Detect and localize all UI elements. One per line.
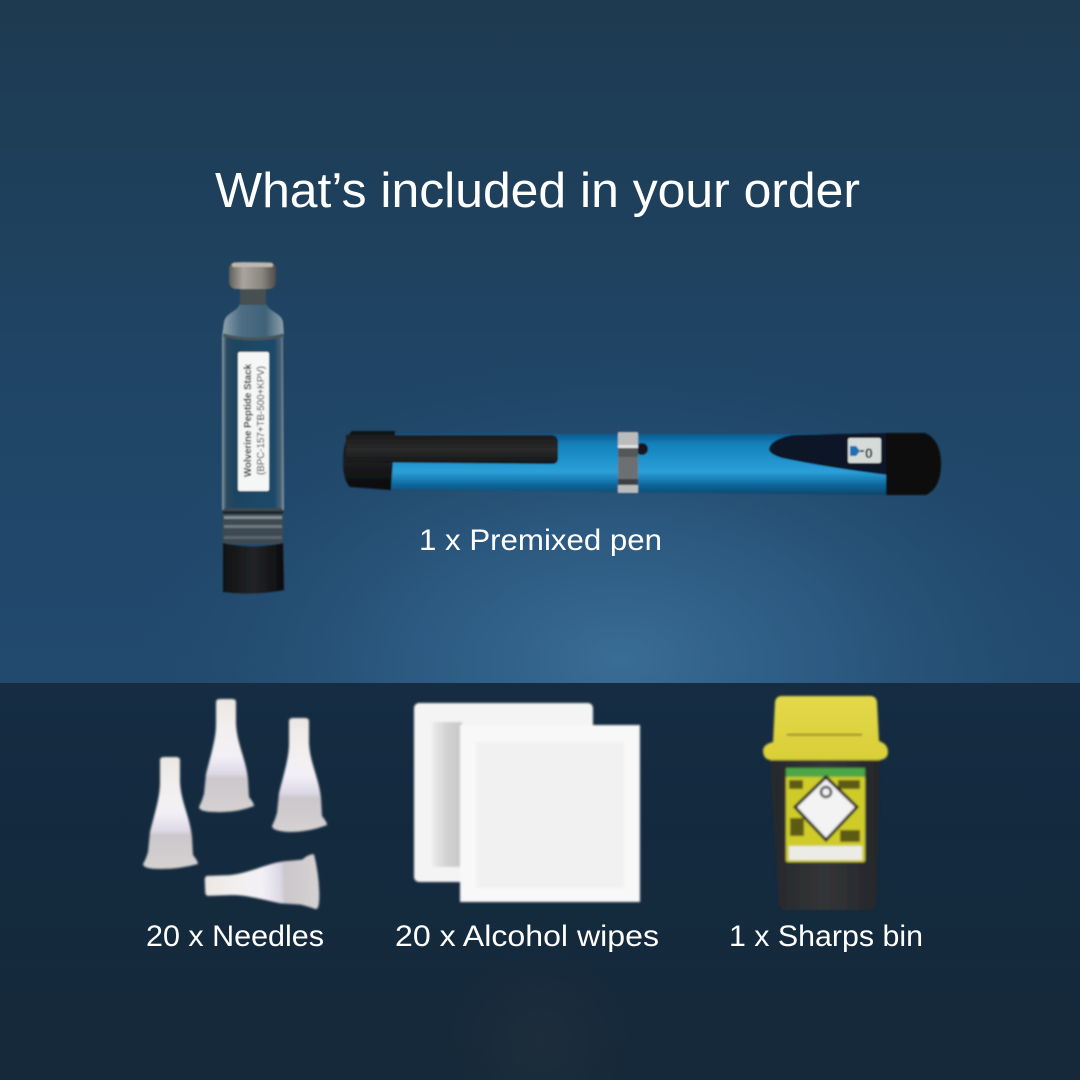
vial cap <box>229 262 276 289</box>
pen dark window housing <box>769 433 888 475</box>
needle 3 <box>272 718 327 832</box>
icon: injector pen <box>343 431 941 495</box>
pen left black end <box>343 431 395 490</box>
pen end cap <box>886 433 941 495</box>
vial glass body <box>222 336 284 510</box>
back wipe <box>414 703 593 882</box>
icon: peptide vial <box>222 262 284 594</box>
needle 4 <box>204 854 320 913</box>
pen clip <box>346 435 558 464</box>
vial label: Wolverine Peptide Stack <box>243 364 254 477</box>
bin label <box>786 768 865 862</box>
vial threads <box>223 508 283 544</box>
background: upper gradient <box>0 0 1080 684</box>
hazard diamond <box>795 777 857 840</box>
vial black base <box>223 543 284 594</box>
needle 2 <box>199 699 254 812</box>
icon: alcohol wipes <box>414 703 640 902</box>
pen dose window: 0 <box>865 445 873 461</box>
label: needles: 20 x Needles <box>146 920 324 953</box>
label table <box>789 846 862 860</box>
biohazard mark <box>821 787 831 797</box>
label small print <box>789 780 860 842</box>
vial label: (BPC-157+TB-500+KPV) <box>256 366 267 475</box>
needle 1 <box>143 757 198 869</box>
icon: needles <box>143 699 327 913</box>
pen dose window <box>848 438 881 463</box>
vial label <box>238 352 269 491</box>
front wipe <box>460 725 640 902</box>
icon: sharps bin <box>763 696 888 910</box>
background: lower dark panel <box>0 683 1080 1080</box>
bin lid <box>763 696 888 760</box>
bin lid slot <box>787 734 862 736</box>
bin body <box>770 755 880 910</box>
vial shoulder <box>222 303 284 340</box>
vial neck <box>240 286 266 305</box>
pen blue barrel <box>380 434 890 495</box>
pen silver ring <box>618 432 638 493</box>
label: sharps bin: 1 x Sharps bin <box>729 920 923 953</box>
label: alcohol wipes: 20 x Alcohol wipes <box>395 920 659 953</box>
pen dot <box>636 443 648 455</box>
label: premixed pen: 1 x Premixed pen <box>419 524 662 557</box>
title: What’s included in your order <box>215 164 860 218</box>
